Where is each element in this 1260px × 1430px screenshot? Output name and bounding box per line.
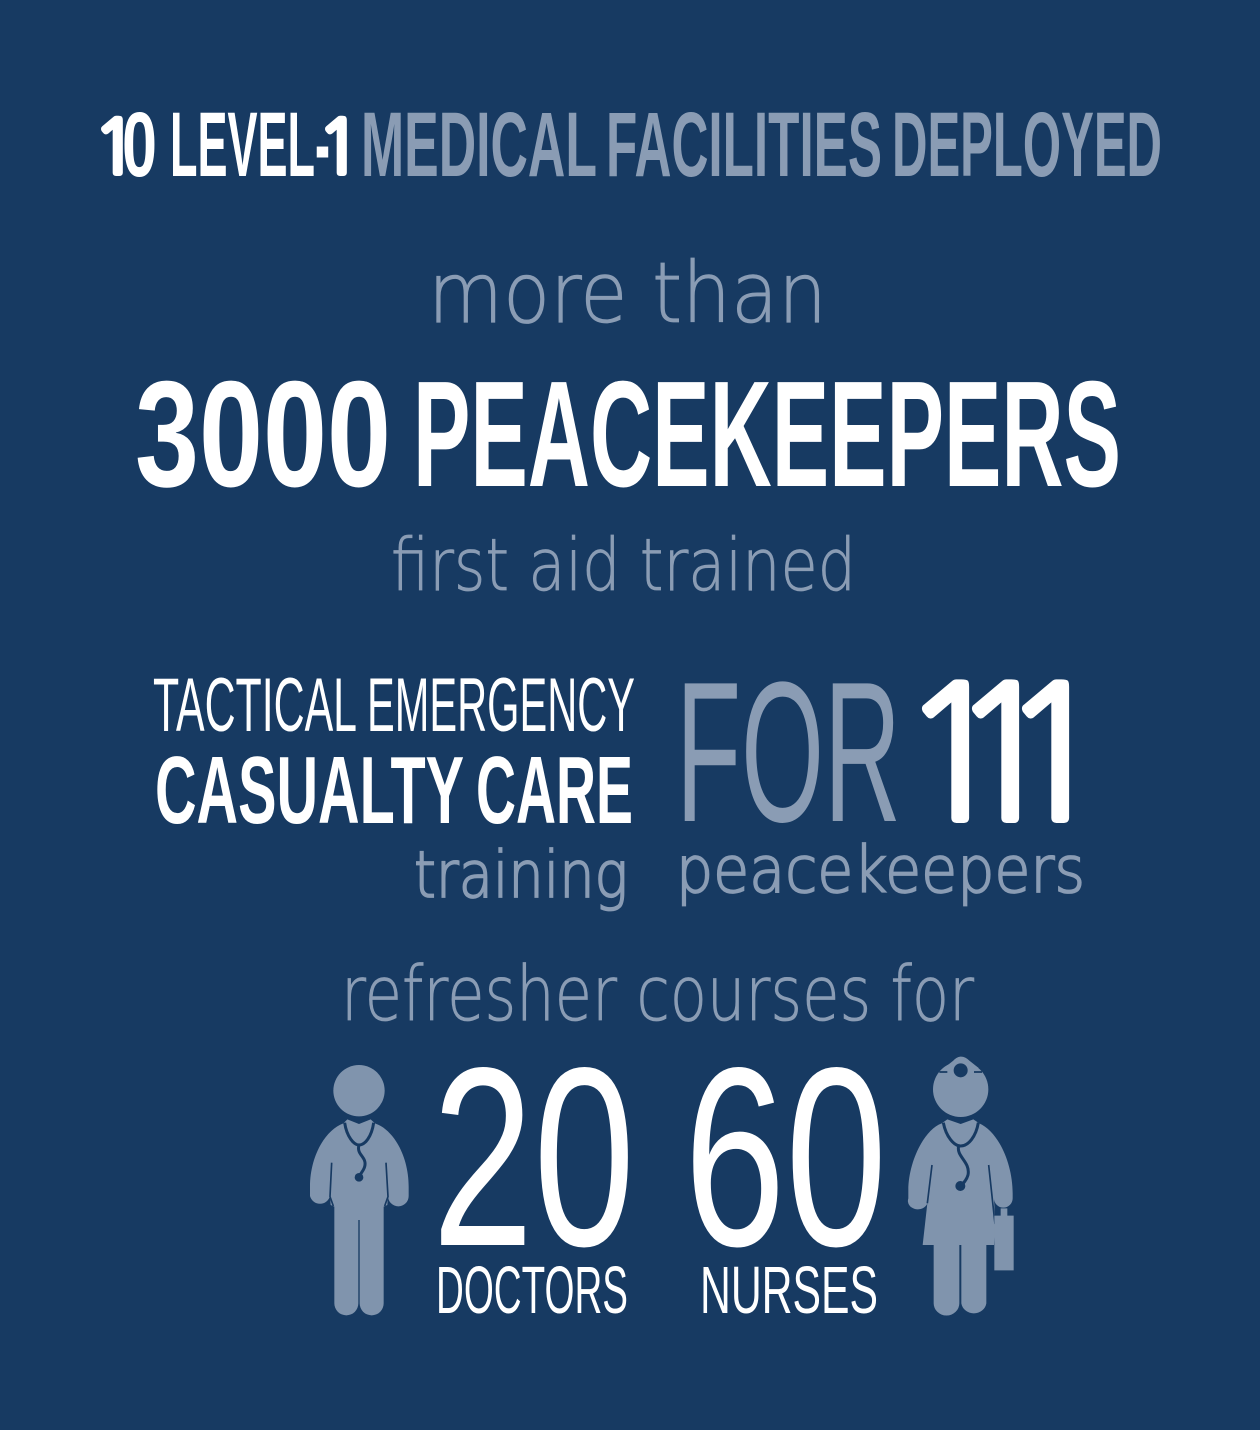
text block: for 111 peacekeepers: 111 [898,661,1111,847]
heading: facilities deployed [93,94,1162,196]
text block: tactical emergency casualty care training: TACTICAL [153,663,357,748]
text block: tactical emergency casualty care training: CARE [476,737,633,844]
text block: for 111 peacekeepers: FOR [676,641,901,864]
number: 60 nurses: 60 [684,1015,887,1300]
text block: tactical emergency casualty care training: training [414,839,628,913]
number: 20 doctors: DOCTORS [436,1253,628,1328]
text block: tactical emergency casualty care training: CASUALTY [155,737,464,844]
text block: tactical emergency casualty care training: EMERGENCY [367,663,635,748]
heading: facilities deployed: 0 [122,94,157,196]
heading: 3000 peacekeepers: 3000 [135,349,391,518]
heading: 3000 peacekeepers [135,349,1121,518]
icon: doctor [310,1065,409,1315]
heading: facilities deployed: FACILITIES [606,94,882,196]
text: first aid trained: first aid trained [391,523,856,607]
heading: facilities deployed: LEVEL- [170,94,330,196]
text block: tactical emergency casualty care training [153,663,635,913]
text: more than: more than [428,244,827,342]
heading: facilities deployed: 1 [317,110,362,184]
number: 60 nurses: NURSES [700,1253,878,1328]
heading: facilities deployed: MEDICAL [361,94,597,196]
icon: nurse [908,1057,1014,1315]
text block: for 111 peacekeepers: peacekeepers [676,834,1085,908]
number: 20 doctors [432,1015,635,1328]
number: 60 nurses [684,1015,887,1328]
text: refresher courses for: refresher courses for [341,949,975,1038]
heading: facilities deployed: 1 [93,110,138,184]
number: 20 doctors: 20 [432,1015,635,1300]
